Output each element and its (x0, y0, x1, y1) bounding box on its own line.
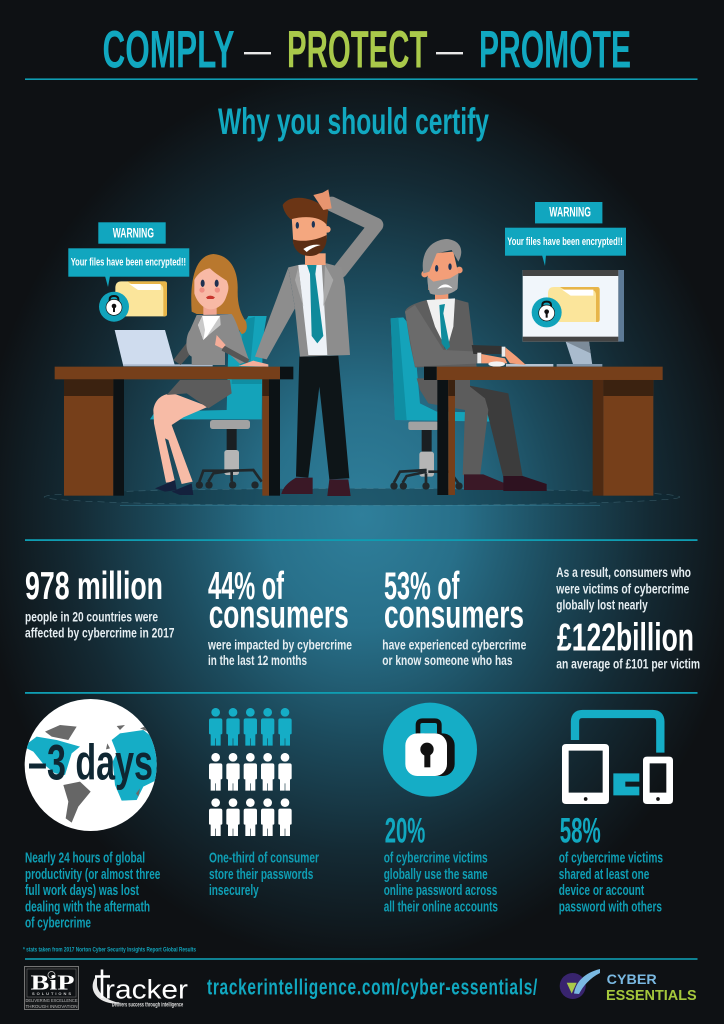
footnote: * stats taken from 2017 Norton Cyber Security Insights Report Global Results (23, 947, 196, 954)
man seated trousers and shoes (417, 378, 547, 491)
text: one-third (209, 850, 319, 899)
logo: BiP Solutions: THROUGH INNOVATION (26, 1004, 78, 1009)
woman upper body (173, 254, 249, 365)
stat: 58%: 58% (560, 812, 601, 851)
stat: 20%: all their online accounts (384, 898, 498, 915)
logo: BiP Solutions: DELIVERING EXCELLENCE (26, 998, 78, 1003)
url: trackerintelligence.com/cyber-essentials/ (207, 974, 538, 999)
text: global productivity: full work days) was lost (25, 882, 139, 899)
row of teal people (209, 708, 292, 746)
stat: 20% (384, 812, 498, 915)
icon: padlock (383, 703, 477, 797)
stat: 53% of consumers: 53% of (384, 565, 460, 608)
stat: 44% of consumers: consumers (209, 593, 349, 636)
man seated lower body and chair (390, 270, 624, 491)
logo: tracker (93, 970, 188, 1009)
ground shadow (44, 488, 680, 506)
text: global productivity (25, 850, 160, 931)
stat: 20%: globally use the same (384, 866, 488, 883)
monitor (506, 270, 624, 367)
stat: 122 billion (556, 564, 700, 671)
laptop (115, 330, 213, 366)
text: one-third: One-third of consumer (209, 850, 319, 867)
warning popup right: Your files have been encrypted!! (507, 236, 623, 248)
icon: shared devices (562, 714, 673, 804)
stat: 978 million: people in 20 countries were (25, 609, 158, 625)
logo: cyber essentials: ESSENTIALS (606, 987, 697, 1004)
stat: 44% of consumers (207, 565, 352, 668)
title (102, 20, 631, 79)
desk right (424, 367, 663, 496)
office chair left (150, 316, 267, 489)
stat: 53% of consumers: or know someone who has (382, 652, 513, 668)
stat: 58%: device or account (559, 882, 644, 899)
stat: 53% of consumers: have experienced cybercrime (382, 636, 526, 652)
warning popup right (505, 202, 626, 266)
stat: 978 million: 978 million (25, 565, 163, 608)
text: global productivity: productivity (or almost three (25, 866, 160, 883)
man standing legs (281, 356, 351, 496)
title: COMPLY (102, 20, 234, 79)
stat: 53% of consumers: consumers (384, 593, 524, 636)
text: global productivity: dealing with the aftermath (25, 898, 150, 915)
stat: 53% of consumers (382, 565, 526, 668)
scene left: woman and man standing (115, 189, 376, 496)
text: global productivity: Nearly 24 hours of global (25, 850, 145, 867)
text: one-third: insecurely (209, 882, 259, 899)
logo: cyber essentials (560, 969, 697, 1004)
stat: 20%: online password across (384, 882, 497, 899)
stat: 58%: of cybercrime victims (559, 850, 663, 867)
text: one-third: store their passwords (209, 866, 313, 883)
warning popup left: WARNING (113, 224, 154, 240)
globe with 3 days: –3 days (28, 734, 153, 790)
woman legs and skirt (153, 380, 232, 495)
logo: BiP Solutions (24, 966, 78, 1010)
logo: cyber essentials: CYBER (607, 971, 657, 987)
rows of white people (209, 753, 292, 836)
text: global productivity: of cybercrime (25, 914, 91, 931)
globe with 3 days (23, 699, 160, 831)
logo: tracker: Delivers success through intelligence (112, 1003, 184, 1009)
stat: 58%: shared at least one (559, 866, 649, 883)
stat: 44% of consumers: 44% of (208, 565, 285, 608)
logo: BiP Solutions: BiP (30, 970, 75, 994)
man seated upper body (405, 239, 526, 367)
warning popup left: Your files have been encrypted!! (71, 257, 186, 269)
title: PROTECT (287, 20, 428, 79)
man standing head (283, 189, 332, 265)
stat: 978 million: affected by cybercrime in 2017 (25, 625, 175, 641)
heading: why you should certify: Why you should certify (218, 100, 489, 142)
folder with lock left (99, 281, 167, 322)
stat: 20%: 20% (385, 812, 425, 851)
man standing torso (255, 204, 376, 359)
illustration: office scene (44, 189, 680, 506)
people pictogram (209, 708, 292, 836)
warning popup right: WARNING (549, 204, 591, 220)
stat: 44% of consumers: in the last 12 months (208, 652, 307, 668)
office chair right (390, 317, 493, 490)
logo: tracker: racker (105, 974, 188, 1004)
stat: 58%: password with others (559, 898, 662, 915)
stat: 58% (559, 812, 663, 915)
stat: 44% of consumers: were impacted by cybercrime (207, 636, 352, 652)
stat: 978 million (25, 565, 175, 641)
stat: 122 billion: globally lost nearly (556, 596, 648, 612)
stat: 20%: of cybercrime victims (384, 850, 488, 867)
warning popup left (68, 222, 189, 287)
logo: BiP Solutions: SOLUTIONS (32, 991, 71, 996)
desk left (55, 361, 293, 496)
